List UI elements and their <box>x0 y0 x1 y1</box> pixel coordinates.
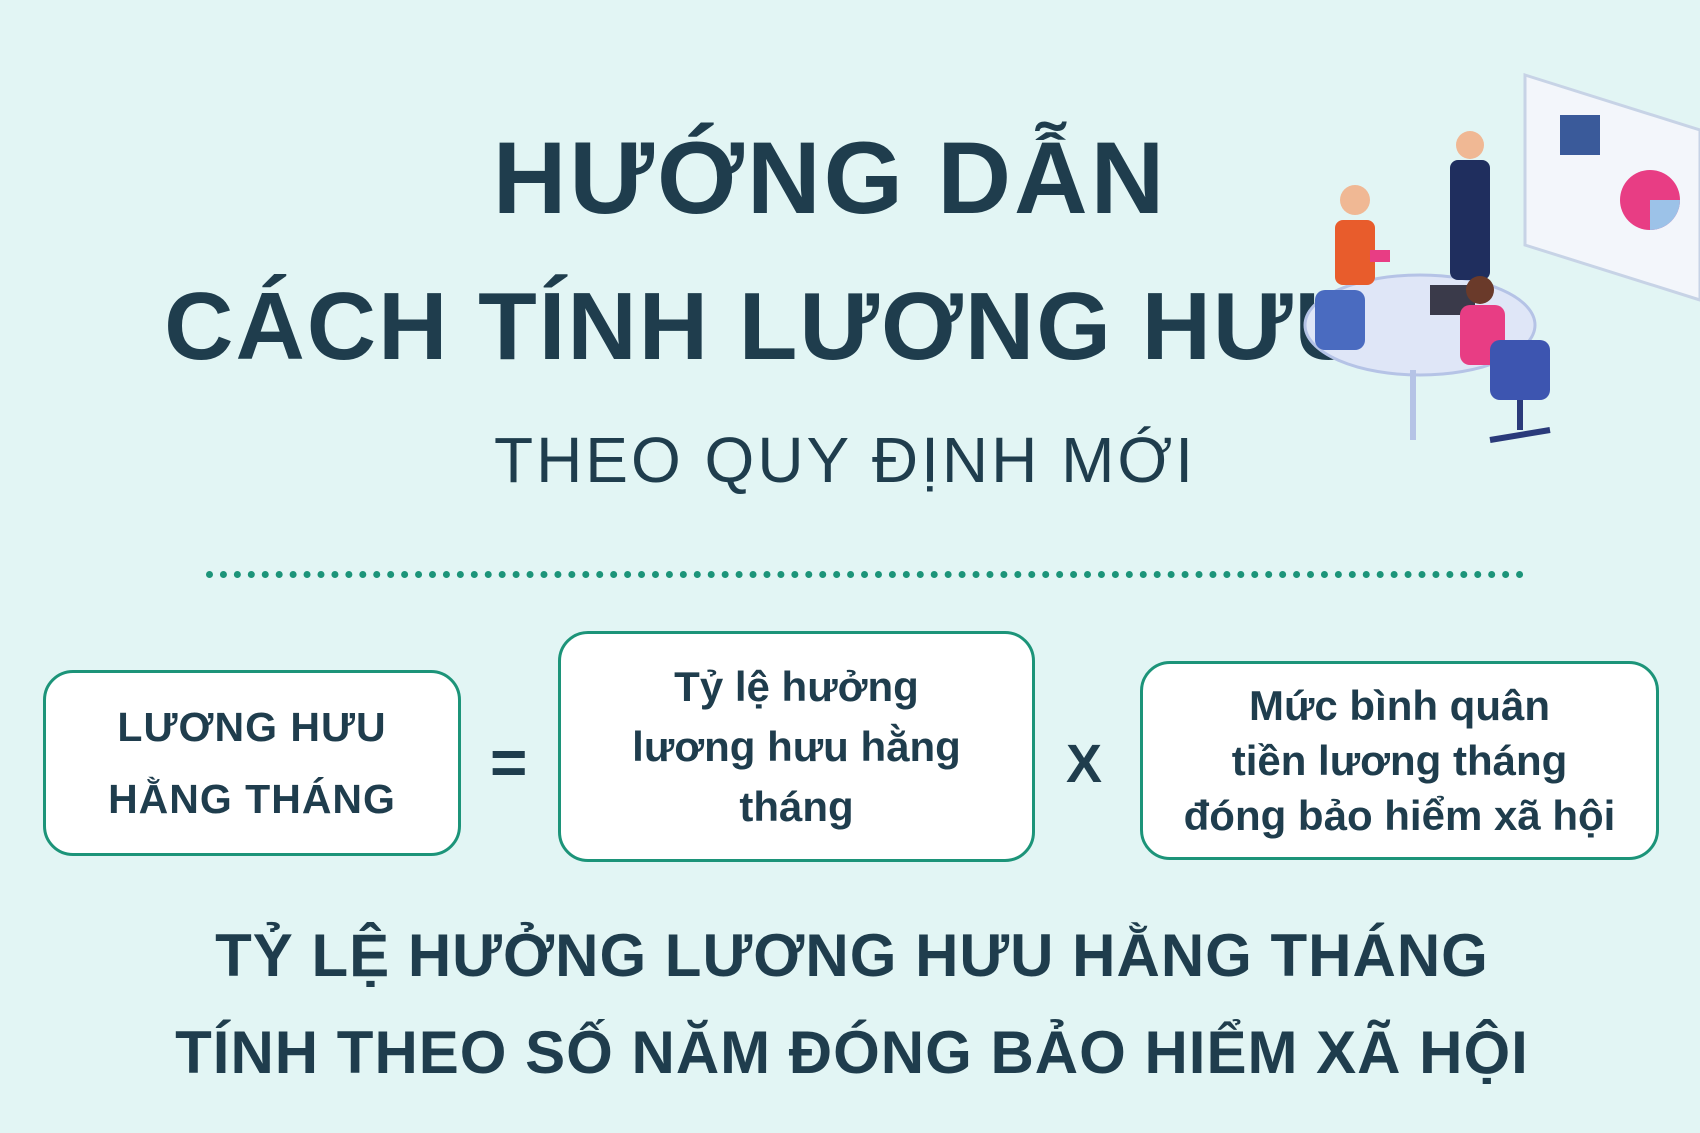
bottom heading: TÍNH THEO SỐ NĂM ĐÓNG BẢO HIỂM XÃ HỘI <box>175 1019 1529 1086</box>
subtitle: THEO QUY ĐỊNH MỚI <box>494 424 1196 496</box>
box: tỷ lệ hưởng: lương hưu hằng <box>632 722 961 770</box>
title line 2: CÁCH TÍNH LƯƠNG HƯU <box>164 273 1366 380</box>
box: tỷ lệ hưởng: Tỷ lệ hưởng <box>674 662 919 710</box>
equals sign: = <box>490 726 527 798</box>
box: lương hưu hằng tháng <box>43 670 461 856</box>
bottom heading <box>175 922 1529 1086</box>
bottom heading: TỶ LỆ HƯỞNG LƯƠNG HƯU HẰNG THÁNG <box>215 922 1489 989</box>
box: lương hưu hằng tháng: HẰNG THÁNG <box>108 776 396 822</box>
box: mức bình quân: đóng bảo hiểm xã hội <box>1184 792 1615 839</box>
box: tỷ lệ hưởng: tháng <box>739 782 854 830</box>
title line 1: HƯỚNG DẪN <box>493 121 1167 235</box>
box: tỷ lệ hưởng <box>558 631 1035 862</box>
box: mức bình quân: Mức bình quân <box>1249 682 1550 729</box>
box: mức bình quân: tiền lương tháng <box>1232 737 1567 784</box>
dotted divider <box>206 571 1524 578</box>
box: lương hưu hằng tháng: LƯƠNG HƯU <box>117 704 387 750</box>
illustration: meeting <box>1304 73 1700 443</box>
multiply sign: X <box>1066 734 1102 794</box>
box: mức bình quân <box>1140 661 1659 860</box>
